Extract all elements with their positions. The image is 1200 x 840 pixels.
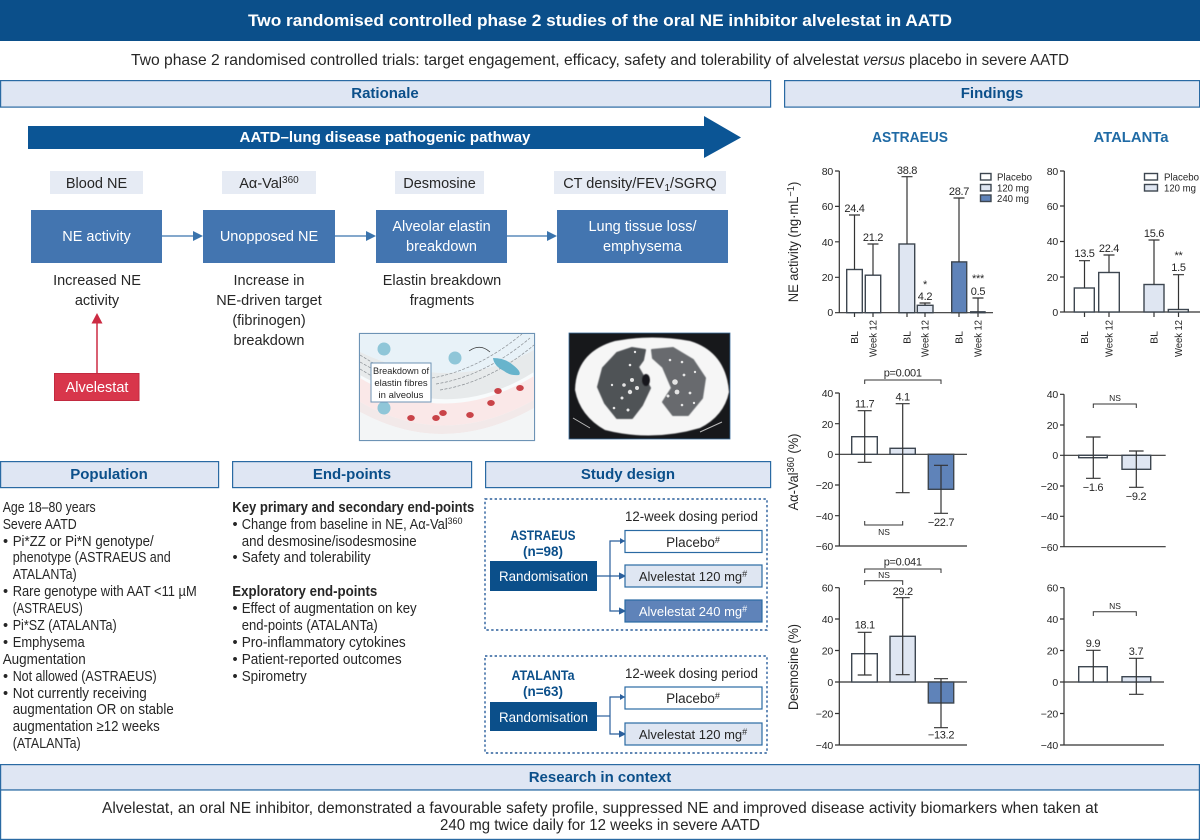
chart: ATALANTa desmosine: 0 [1052,677,1058,689]
chart: ASTRAEUS NE activity: 38.8 [897,165,917,177]
text block: exploratory end-points: • [232,669,238,685]
outcome text: target breakdown: breakdown [234,333,304,349]
text block: exploratory end-points: • [232,601,238,617]
image: CT scan of lungs [569,333,730,439]
pathway step: elastin breakdown: Alveolar elastin [392,219,491,235]
pathway step: NE activity [31,210,162,263]
outcome text: increased NE activity: activity [75,293,120,309]
chart: ATALANTa NE activity: 60 [1047,201,1058,213]
chart: ATALANTa NE activity: 1.5 [1171,262,1186,274]
chart: ASTRAEUS A-alpha-Val360: −40 [816,511,833,523]
chart: ATALANTa NE activity: Week 12 [1173,320,1185,357]
text block: population criteria: • [3,534,8,550]
chart: ATALANTa NE activity: 20 [1047,272,1058,284]
chart: ASTRAEUS NE activity: *** [972,273,985,285]
study title: ASTRAEUS: ASTRAEUS [872,129,948,146]
chart: ASTRAEUS desmosine: 40 [822,614,833,626]
alvelestat box: Alvelestat [66,380,128,396]
conclusion text [1,790,1199,839]
chart: ATALANTa A-alpha-Val360: 40 [1047,389,1058,401]
biomarker label: A-alpha-Val360: 360 [282,175,299,186]
chart: ATALANTa NE activity: BL [1148,331,1160,344]
biomarker label: CT density: 1 [664,183,670,194]
subtitle: Two phase 2 randomised controlled trials: target engagement, efficacy, safety and tolerability of alvelestat [131,52,860,69]
arrow: step 2 to 3 [335,231,376,241]
bracket: NS: NS [1109,601,1121,611]
heading: study design: Study design [581,466,675,483]
flow: ASTRAEUS: # [715,535,720,545]
text block: key end-points: Safety and tolerability [242,550,371,566]
text block: population criteria: Not allowed (ASTRAEUS) [13,669,157,685]
chart: ATALANTa NE activity: 0 [1052,307,1058,319]
chart: ASTRAEUS NE activity: Week 12 [920,320,932,357]
heading: rationale: Rationale [351,85,419,102]
chart: ASTRAEUS NE activity: 24.4 [844,203,865,215]
text block: key end-points: 360 [448,516,463,526]
text block: exploratory end-points: Pro-inflammatory cytokines [242,635,406,651]
biomarker label: A-alpha-Val360: Aα-Val [239,176,282,192]
flow: ASTRAEUS: Alvelestat 120 mg [639,569,742,584]
subtitle: placebo in severe AATD [909,52,1069,69]
bracket: p=0.041: p=0.041 [884,556,922,568]
chart: ASTRAEUS NE activity: Week 12 [868,320,880,357]
text block: population criteria: (ATALANTa) [13,736,81,752]
outcome text: increased NE activity [53,273,141,309]
biomarker label: desmosine: Desmosine [403,176,476,192]
chart: ASTRAEUS NE activity: Week 12 [972,320,984,357]
y axis label: desmosine: Desmosine (%) [785,624,801,710]
bracket: NS [865,521,903,537]
text block: population criteria [3,500,197,752]
pathway step: NE activity: NE activity [62,229,131,245]
chart: ASTRAEUS A-alpha-Val360: 4.1 [895,392,910,404]
text block: population criteria: • [3,584,8,600]
text block: exploratory end-points: Exploratory end-points [232,584,377,600]
panel: research in context [1,765,1199,839]
biomarker label: CT density: CT density/FEV [563,176,664,192]
chart: ASTRAEUS NE activity: BL [954,331,966,344]
text block: population criteria: • [3,635,8,651]
chart: ASTRAEUS A-alpha-Val360: −22.7 [928,517,954,529]
heading: findings [785,81,1200,107]
chart: ASTRAEUS A-alpha-Val360: 20 [822,419,833,431]
bracket: NS: NS [878,570,890,580]
panel: population [1,462,219,752]
chart: ATALANTa A-alpha-Val360 [1041,389,1166,554]
conclusion text: 240 mg twice daily for 12 weeks in severe AATD [440,817,760,834]
biomarker label: blood NE: Blood NE [66,176,127,192]
text block: population criteria: Rare genotype with AAT <11 µM [13,584,197,600]
bracket: p=0.001 [865,368,941,384]
chart: ATALANTa desmosine: −20 [1041,708,1058,720]
flow: ASTRAEUS: ASTRAEUS [510,527,576,543]
chart: ATALANTa desmosine: −40 [1041,740,1058,752]
text block: population criteria: Emphysema [13,635,86,651]
chart: ASTRAEUS desmosine: 60 [822,582,833,594]
chart: ASTRAEUS NE activity: 21.2 [863,232,883,244]
pathway step: unopposed NE: Unopposed NE [220,229,318,245]
chart: ASTRAEUS NE activity: 0.5 [971,286,985,298]
chart: ASTRAEUS NE activity: 60 [822,201,833,213]
legend [980,172,1032,205]
text block: exploratory end-points [232,584,417,685]
chart: ASTRAEUS desmosine: −20 [816,708,833,720]
y axis label: NE activity: −1 [786,186,797,197]
text block: population criteria: (ASTRAEUS) [13,601,83,617]
text block: population criteria: Pi*SZ (ATALANTa) [13,618,117,634]
text block: key end-points: and desmosine/isodesmosine [242,534,417,550]
biomarker label: A-alpha-Val360 [222,171,316,194]
chart: ATALANTa NE activity: 15.6 [1144,228,1164,240]
biomarker label: blood NE [50,171,143,194]
chart: ATALANTa NE activity: 80 [1047,166,1058,178]
heading: end-points [233,462,472,488]
biomarker label: desmosine [395,171,484,194]
panel: end-points [232,462,474,685]
text block: population criteria: • [3,618,8,634]
flow: ASTRAEUS: # [742,604,747,614]
pathway step: tissue loss: emphysema [603,239,683,255]
legend: 120 mg [1164,182,1196,194]
chart: ATALANTa NE activity: 22.4 [1099,243,1119,255]
outcome text: increased NE activity: Increased NE [53,273,141,289]
bracket: NS [865,570,903,585]
biomarker label: CT density [554,171,726,194]
heading: findings: Findings [961,85,1023,102]
chart: ASTRAEUS desmosine: 20 [822,646,833,658]
chart: ASTRAEUS NE activity: BL [902,331,914,344]
flow: ATALANTa: # [715,691,720,701]
chart: ATALANTa NE activity [1047,166,1200,357]
flow: ATALANTa [485,656,767,753]
biomarker label: CT density: /SGRQ [670,176,717,192]
bracket: NS [1093,393,1136,408]
legend [1144,172,1199,194]
chart: ASTRAEUS desmosine: 29.2 [893,586,913,598]
text block: population criteria: Severe AATD [3,517,77,533]
text block: population criteria: • [3,669,8,685]
chart: ASTRAEUS NE activity: 40 [822,237,833,249]
text block: exploratory end-points: Spirometry [242,669,307,685]
flow: ASTRAEUS: Randomisation [499,568,588,584]
flow: ATALANTa: # [742,727,747,737]
text block: population criteria: ATALANTa) [13,567,77,583]
title banner: Two randomised controlled phase 2 studies of the oral NE inhibitor alvelestat in AATD [248,12,952,30]
text block: key end-points [232,500,474,566]
chart: ASTRAEUS A-alpha-Val360: −20 [816,480,833,492]
text block: exploratory end-points: Effect of augmentation on key [242,601,417,617]
chart: ATALANTa A-alpha-Val360: −60 [1041,542,1058,554]
text block: exploratory end-points: Patient-reported outcomes [242,652,402,668]
bracket: p=0.001: p=0.001 [884,368,922,380]
arrow: pathogenic pathway: AATD–lung disease pathogenic pathway [240,130,530,146]
heading: population: Population [70,466,148,483]
illustration: alveolar elastin [360,334,534,440]
heading: population [1,462,219,488]
bracket: p=0.041 [865,556,941,573]
flow: ASTRAEUS: (n=98) [523,543,563,559]
pathway step: tissue loss: Lung tissue loss/ [588,219,697,235]
arrow: step 1 to 2 [162,231,203,241]
flow: ATALANTa: 12-week dosing period [625,665,758,681]
chart: ATALANTa A-alpha-Val360: 0 [1052,450,1058,462]
text block: exploratory end-points: end-points (ATALANTa) [242,618,378,634]
chart: ATALANTa NE activity: ** [1175,250,1183,262]
text block: population criteria: • [3,686,8,702]
chart: ASTRAEUS A-alpha-Val360: 40 [822,388,833,400]
text block: population criteria: Age 18–80 years [3,500,96,516]
panel: rationale [1,81,771,440]
chart: ASTRAEUS desmosine: −13.2 [928,730,954,742]
chart: ASTRAEUS NE activity: 80 [822,166,833,178]
panel: study design [485,462,771,753]
text block: population criteria: augmentation ≥12 weeks [13,719,160,735]
chart: ATALANTa desmosine: 3.7 [1129,646,1143,658]
text block: key end-points: • [232,517,238,533]
chart: ASTRAEUS NE activity: 4.2 [918,291,932,303]
chart: ASTRAEUS desmosine: −40 [816,740,833,752]
chart: ATALANTa A-alpha-Val360: −9.2 [1126,491,1146,503]
subtitle: versus [863,52,905,69]
chart: ASTRAEUS NE activity [822,165,1032,357]
flow: ASTRAEUS: # [742,569,747,579]
outcome text: target breakdown: Increase in [234,273,304,289]
y axis label: NE activity: NE activity (ng·mL [786,197,801,302]
chart: ATALANTa NE activity: 13.5 [1074,248,1095,260]
chart: ATALANTa NE activity: BL [1079,331,1091,344]
chart: ASTRAEUS desmosine: 18.1 [855,620,875,632]
chart: ASTRAEUS A-alpha-Val360: 11.7 [855,398,875,410]
flow: ASTRAEUS: 12-week dosing period [625,508,758,524]
bracket: NS: NS [1109,393,1121,403]
chart: ATALANTa A-alpha-Val360: −20 [1041,481,1058,493]
heading: end-points: End-points [313,466,391,483]
arrow: step 3 to 4 [507,231,557,241]
outcome text: fragments: fragments [410,293,474,309]
chart: ASTRAEUS NE activity: BL [849,331,861,344]
illustration: alveolar elastin: elastin fibres [374,378,428,389]
bracket: NS [1093,601,1136,616]
chart: ASTRAEUS NE activity: * [923,279,928,291]
pathway step: tissue loss [557,210,728,263]
arrow: pathogenic pathway [28,116,741,158]
flow: ATALANTa: Randomisation [499,709,588,725]
chart: ASTRAEUS A-alpha-Val360: 0 [827,449,833,461]
heading: study design [486,462,771,488]
chart: ASTRAEUS NE activity: 28.7 [949,186,969,198]
legend: 240 mg [997,193,1029,205]
chart: ASTRAEUS NE activity: 20 [822,272,833,284]
text block: exploratory end-points: • [232,635,238,651]
text block: key end-points: Change from baseline in NE, Aα-Val [242,517,448,533]
y axis label: A-alpha-Val360: Aα-Val [786,472,801,510]
heading: research in context: Research in context [529,769,671,786]
legend: Placebo [997,172,1032,184]
illustration: alveolar elastin: in alveolus [379,390,424,401]
arrow: alvelestat inhibition [92,313,102,374]
chart: ASTRAEUS NE activity: 0 [827,307,833,319]
chart: ATALANTa desmosine: 9.9 [1086,638,1100,650]
title banner [0,0,1200,41]
chart: ATALANTa NE activity: Week 12 [1104,320,1116,357]
panel: findings [785,81,1200,752]
pathway step: elastin breakdown [376,210,507,263]
flow: ASTRAEUS [485,499,767,630]
flow: ASTRAEUS: Alvelestat 240 mg [639,604,742,619]
chart: ATALANTa A-alpha-Val360: 20 [1047,420,1058,432]
heading: research in context [1,765,1199,790]
flow: ATALANTa: (n=63) [523,683,563,699]
y axis label: A-alpha-Val360: (%) [786,434,801,457]
chart: ASTRAEUS A-alpha-Val360 [816,368,967,553]
flow: ATALANTa: Placebo [666,691,715,706]
text block: key end-points: • [232,550,238,566]
text block: population criteria: augmentation OR on stable [13,702,174,718]
chart: ATALANTa desmosine: 40 [1047,614,1058,626]
chart: ASTRAEUS desmosine [816,556,967,752]
chart: ASTRAEUS A-alpha-Val360: −60 [816,541,833,553]
outcome text: target breakdown: NE-driven target [216,293,322,309]
text block: population criteria: phenotype (ASTRAEUS and [13,550,171,566]
text block: exploratory end-points: • [232,652,238,668]
legend: 120 mg [997,182,1029,194]
outcome text: fragments: Elastin breakdown [383,273,501,289]
text block: population criteria: Augmentation [3,652,86,668]
conclusion text: Alvelestat, an oral NE inhibitor, demonstrated a favourable safety profile, suppressed NE and improved disease activity biomarkers when taken at [102,800,1099,817]
y axis label: A-alpha-Val360: 360 [786,457,797,472]
heading: rationale [1,81,771,107]
study title: ATALANTa: ATALANTa [1094,129,1169,146]
outcome text: target breakdown [216,273,322,349]
text block: population criteria: Pi*ZZ or Pi*N genotype/ [13,534,155,550]
text block: population criteria: Not currently receiving [13,686,147,702]
alvelestat box [54,374,139,400]
chart: ATALANTa A-alpha-Val360: −1.6 [1083,482,1103,494]
outcome text: fragments [383,273,501,309]
y axis label: NE activity: ) [786,182,801,186]
chart: ASTRAEUS desmosine: 0 [827,677,833,689]
chart: ATALANTa NE activity: 40 [1047,236,1058,248]
flow: ATALANTa: ATALANTa [512,667,575,683]
pathway step: unopposed NE [203,210,335,263]
illustration: alveolar elastin: Breakdown of [373,366,429,377]
chart: ATALANTa A-alpha-Val360: −40 [1041,511,1058,523]
text block: key end-points: Key primary and secondary end-points [232,500,474,516]
outcome text: target breakdown: (fibrinogen) [232,313,306,329]
bracket: NS: NS [878,527,890,537]
chart: ATALANTa desmosine: 60 [1047,582,1058,594]
pathway step: elastin breakdown: breakdown [406,239,477,255]
flow: ATALANTa: Alvelestat 120 mg [639,727,742,742]
flow: ASTRAEUS: Placebo [666,535,715,550]
chart: ATALANTa desmosine: 20 [1047,646,1058,658]
chart: ATALANTa desmosine [1041,582,1164,752]
